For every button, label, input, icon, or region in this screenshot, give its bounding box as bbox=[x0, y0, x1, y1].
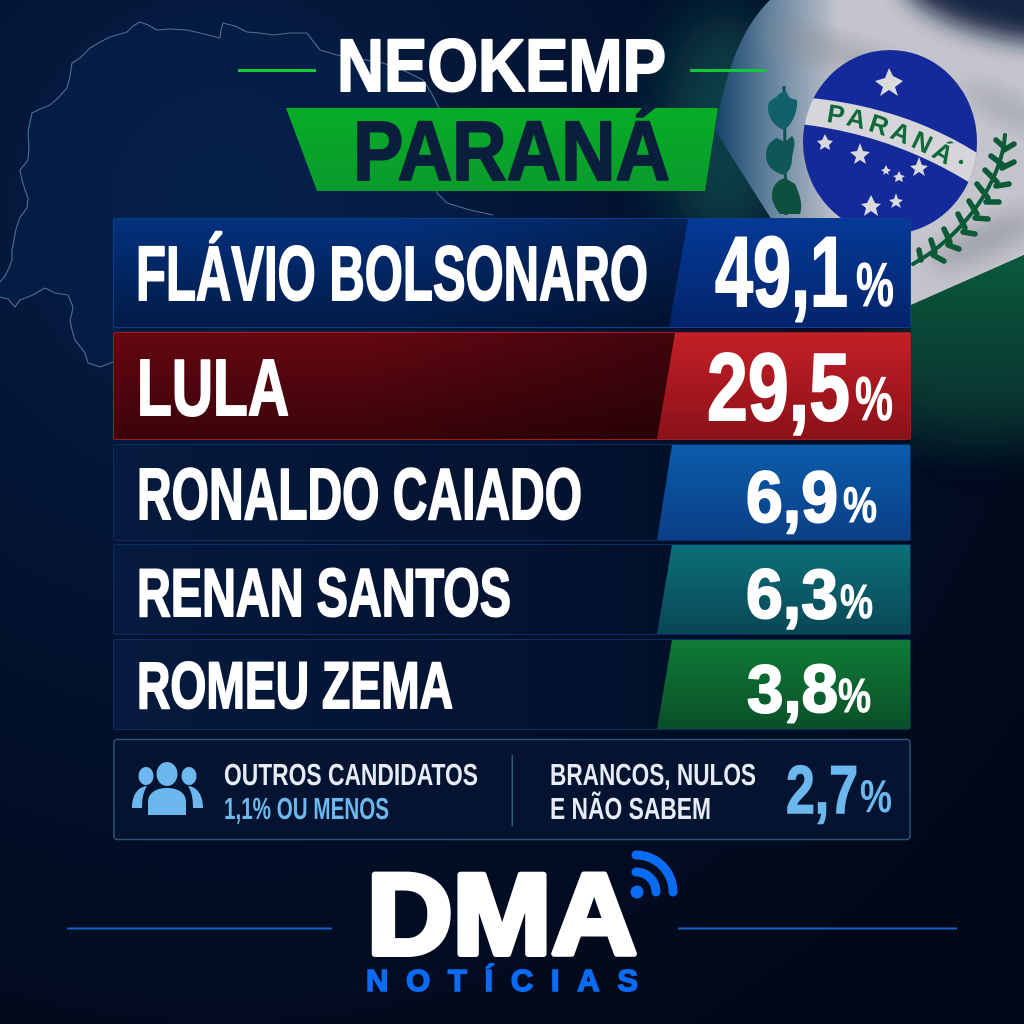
seal band lettering: PARANÁ bbox=[828, 104, 954, 165]
blank votes value: % bbox=[860, 770, 892, 822]
stars on the globe bbox=[817, 68, 928, 216]
name: LULA bbox=[137, 343, 289, 432]
name: RENAN SANTOS bbox=[137, 555, 511, 631]
seal: blue globe bbox=[803, 50, 977, 232]
blank votes label: E NÃO SABEM bbox=[550, 791, 711, 826]
row: Renan Santos bbox=[114, 544, 910, 634]
right laurel branch bbox=[913, 135, 1014, 264]
value: % bbox=[843, 477, 877, 533]
Paraná flag bbox=[715, 0, 1024, 452]
title text: NEOKEMP bbox=[337, 24, 666, 107]
icon: signal waves bbox=[630, 855, 673, 898]
value: % bbox=[855, 365, 893, 434]
logo: DMA Notícias bbox=[366, 851, 673, 998]
title left rule bbox=[238, 69, 316, 72]
divider bbox=[512, 755, 513, 826]
icon: people bbox=[132, 762, 203, 815]
value: 49,1 bbox=[715, 216, 848, 327]
row: Romeu Zema bbox=[114, 640, 910, 730]
banner text: PARANÁ bbox=[353, 104, 670, 198]
green banner bbox=[286, 104, 718, 198]
value: % bbox=[840, 576, 873, 629]
flag lower green band bbox=[911, 255, 1024, 480]
panel: others bbox=[114, 740, 910, 840]
value: % bbox=[856, 251, 894, 320]
blank votes label bbox=[550, 757, 756, 826]
row: Flávio Bolsonaro bbox=[114, 216, 910, 328]
map of Paraná outline bbox=[0, 22, 493, 367]
row: Lula bbox=[114, 332, 910, 441]
value: 29,5 bbox=[707, 334, 850, 441]
name: RONALDO CAIADO bbox=[137, 455, 582, 535]
logo wordmark: DMA bbox=[367, 851, 637, 979]
others value: 1,1% OU MENOS bbox=[224, 791, 389, 826]
blank votes value: 2,7 bbox=[786, 752, 858, 828]
title bbox=[238, 24, 766, 107]
name: ROMEU ZEMA bbox=[137, 648, 453, 722]
value: % bbox=[838, 670, 871, 723]
logo subtitle: NOTÍCIAS bbox=[366, 963, 638, 998]
title right rule bbox=[690, 69, 766, 72]
value: 3,8 bbox=[747, 651, 838, 727]
value: 6,3 bbox=[746, 555, 838, 633]
flag cloth bbox=[700, 0, 1024, 310]
name: FLÁVIO BOLSONARO bbox=[136, 230, 648, 317]
blank votes label: BRANCOS, NULOS bbox=[550, 757, 756, 792]
row: Ronaldo Caiado bbox=[114, 444, 910, 540]
footer rule left bbox=[67, 928, 332, 930]
others label: OUTROS CANDIDATOS bbox=[224, 757, 478, 792]
left laurel branch bbox=[766, 86, 801, 215]
value: 6,9 bbox=[746, 458, 838, 538]
footer rule right bbox=[678, 928, 957, 930]
